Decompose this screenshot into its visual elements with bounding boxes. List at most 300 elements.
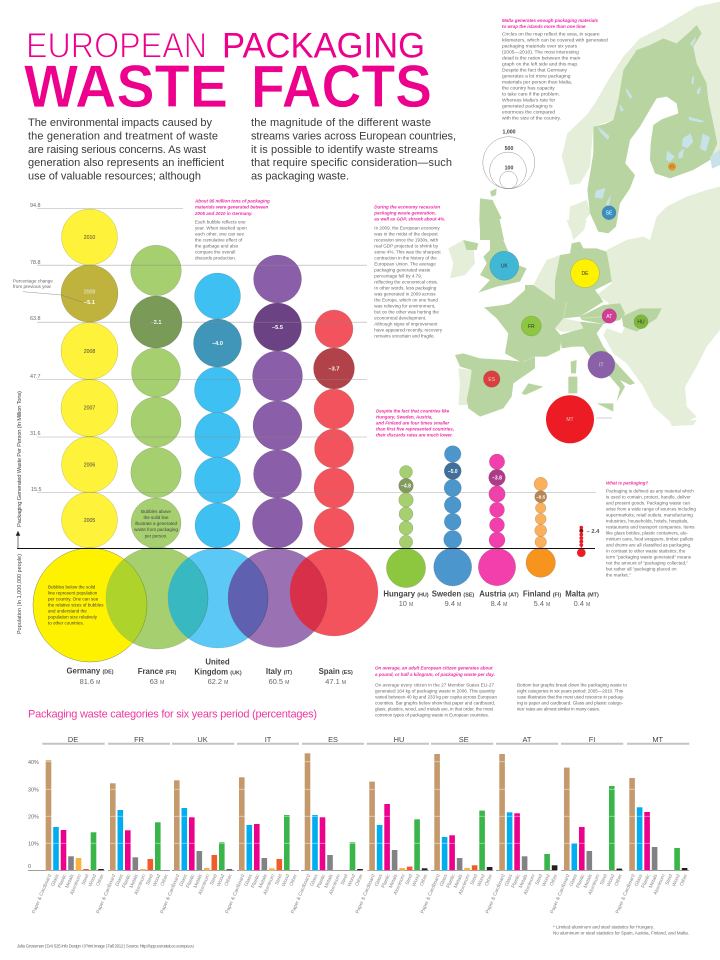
note: recession: percentage fell by 4.79, xyxy=(374,274,422,279)
note: what is packaging: but rather all "packaging placed on xyxy=(606,567,677,572)
note: bottom bar graphs: ing is paper and cardboard. Glass and plastic catego- xyxy=(517,700,623,705)
chart: FI: Other xyxy=(614,873,624,887)
map bubbles by country xyxy=(483,163,676,443)
note: what is packaging xyxy=(606,480,696,578)
Sweden waste bubbles: –5.0 xyxy=(448,469,458,475)
callout: percentage change xyxy=(13,278,82,302)
Germany waste bubbles: 2009 xyxy=(84,290,95,296)
chart: FR: Other xyxy=(160,873,170,887)
chart: FI: Wood xyxy=(606,873,616,887)
map legend circles xyxy=(483,130,535,189)
chart: SE: Steel xyxy=(469,873,479,886)
title: FACTS xyxy=(251,53,432,120)
map bubble: SE xyxy=(602,206,616,220)
note: what is packaging: What is packaging? xyxy=(606,480,649,485)
axis values: 47.7 xyxy=(30,374,40,380)
note: recession: packaging waste generation, xyxy=(373,210,436,215)
chart grid lines xyxy=(44,762,690,843)
chart: ES: Glass xyxy=(309,873,320,887)
Germany waste bubbles: 2010 xyxy=(84,235,95,241)
axis values: 78.8 xyxy=(30,260,40,266)
title: PACKAGING xyxy=(222,26,425,65)
label: France xyxy=(138,667,176,686)
label: Italy: Italy (IT) xyxy=(266,667,292,676)
label: United Kingdom: Kingdom (UK) xyxy=(194,668,242,676)
chart: DE: Plastic xyxy=(57,873,68,889)
label: Hungary xyxy=(383,590,429,608)
note: smaller countries xyxy=(376,408,454,437)
map bubble: DE xyxy=(571,259,599,288)
chart: DE: DE xyxy=(68,735,78,744)
chart: SE: Other xyxy=(484,873,494,887)
footnote: No aluminum or steel statistics for Spain, Austria, Finland, and Malta. xyxy=(553,930,689,936)
title: WASTE xyxy=(24,53,228,120)
note: Malta: detail is the ration between the main xyxy=(502,56,581,62)
axis values: 94.8 xyxy=(30,203,40,209)
note: Malta: (2005—2010). The most interesting xyxy=(502,50,579,56)
note: recession: In other words, less packaging xyxy=(374,286,437,291)
chart: FR: Wood xyxy=(152,873,162,887)
chart: AT: Paper & Cardboard xyxy=(485,873,507,915)
map bubble: SE: SE xyxy=(606,210,613,216)
chart: AT: Aluminum xyxy=(523,873,537,896)
note: 95 million tons: each other, one can see xyxy=(195,231,244,236)
note: Malta: to take care if the problem. xyxy=(502,92,560,98)
chart: MT: Glass xyxy=(634,873,644,887)
note: bottom bar graphs: case illustrates that the most used resource in packag- xyxy=(517,694,624,699)
country labels xyxy=(66,590,599,686)
map bubble: FR: FR xyxy=(528,324,535,330)
label: Italy: 60.5 M xyxy=(269,677,289,686)
chart: HU: Glass xyxy=(374,873,384,887)
map bubble: IT xyxy=(588,351,615,378)
chart: MT: Steel xyxy=(664,873,674,886)
callout: percentage change: Percentage change xyxy=(13,278,53,283)
chart: MT: Plastic xyxy=(640,873,652,889)
chart: SE: Metals xyxy=(453,873,464,889)
Germany waste bubbles: 2006 xyxy=(84,462,95,468)
chart axis labels: 10% xyxy=(28,841,39,847)
chart axis labels xyxy=(28,760,39,870)
note: bottom bar graphs xyxy=(517,682,627,711)
intro text: the magnitude of the different waste xyxy=(251,117,431,129)
Spain waste bubbles: –3.7 xyxy=(329,366,339,372)
chart: FR: Steel xyxy=(145,873,155,886)
chart: AT xyxy=(485,735,559,915)
axis label: population: Population (In 1,000,000 people) xyxy=(17,554,23,634)
chart: MT xyxy=(615,735,689,915)
footer credit: Julia Grossman | DAI 525 Info Design I | Print Image | Fall 2012 | Source: http://epp.eurostat.ec.europa.eu xyxy=(17,943,195,948)
chart: ES xyxy=(290,735,365,915)
chart: SE: Aluminum xyxy=(458,873,472,896)
France waste bubbles: per person. xyxy=(145,533,167,538)
note: recession: reflecting the economical crisis. xyxy=(374,280,438,285)
chart: HU xyxy=(355,735,429,915)
note: what is packaging: not the amount of "packaging collected," xyxy=(606,561,688,566)
population bubble note: population size relatively xyxy=(48,614,98,620)
France waste bubbles: –3.1 xyxy=(151,320,161,326)
chart: UK xyxy=(159,735,234,915)
map bubble: AT xyxy=(602,309,617,323)
chart: AT: AT xyxy=(523,735,532,744)
map bubble: MT xyxy=(546,395,612,443)
chart: IT: Metals xyxy=(258,873,269,889)
note: Malta: Malta generates enough packaging materials xyxy=(502,18,599,23)
note: what is packaging: In contrast to other waste statistics, the xyxy=(606,549,686,554)
note: recession: economical development. xyxy=(374,316,426,321)
note: what is packaging: the market." xyxy=(606,573,631,578)
axis values: 31.6 xyxy=(30,431,40,437)
intro text: use of valuable resources; although xyxy=(28,170,201,182)
label: United Kingdom: 62.2 M xyxy=(208,677,228,686)
chart: SE: SE xyxy=(459,735,469,744)
chart: FI: FI xyxy=(589,735,595,744)
map of Europe xyxy=(448,2,720,426)
map bubble: UK: UK xyxy=(501,264,508,270)
chart: FR: Metals xyxy=(129,873,140,889)
note: Malta: packaging materials over six years xyxy=(502,44,578,50)
Hungary waste bubbles: –4.8 xyxy=(401,484,411,490)
France waste bubbles: the solid line xyxy=(143,515,169,520)
France waste bubbles xyxy=(130,245,182,548)
chart: FI: Aluminum xyxy=(587,873,601,896)
map bubble: UK xyxy=(490,251,519,280)
chart: HU: Metals xyxy=(388,873,399,889)
intro text: the generation and treatment of waste xyxy=(28,130,218,142)
note: recession: as well as GDP, shrank about 4%. xyxy=(374,216,446,221)
chart: SE xyxy=(420,735,494,915)
France waste bubbles: illustrate a generated xyxy=(135,521,178,526)
note: 95 million tons: Each bubble reflects one xyxy=(195,219,246,224)
note: 95 million tons: the cumulative effect of xyxy=(195,237,243,242)
chart: FR: Aluminum xyxy=(133,873,147,896)
note: what is packaging: is used to contain, protect, handle, deliver xyxy=(606,495,691,500)
map bubble: AT: AT xyxy=(606,314,612,320)
chart: UK: Other xyxy=(224,873,234,887)
population bubble note: and understand the xyxy=(48,608,87,614)
footnote xyxy=(553,924,689,936)
chart: ES: Other xyxy=(354,873,365,887)
title: EUROPEAN xyxy=(26,26,207,65)
note: 95 million tons: discards production. xyxy=(195,255,236,260)
map bubble: FI xyxy=(668,163,676,170)
chart: HU: Other xyxy=(419,873,429,887)
note: average citizen: countries. Bar graphs below show that paper and cardboard, xyxy=(375,700,495,705)
chart: AT: Steel xyxy=(534,873,544,886)
note: smaller countries: their discards rates are much lower. xyxy=(376,432,453,437)
Germany waste bubbles: –5.1 xyxy=(84,300,95,306)
note: recession: Although signs of improvement xyxy=(374,322,438,327)
note: average citizen: a pound, or half a kilogram, of packaging waste per day. xyxy=(375,672,495,677)
population bubble note xyxy=(48,584,104,626)
intro text: The environmental impacts caused by xyxy=(28,117,212,129)
chart: HU: HU xyxy=(394,735,404,744)
note: bottom bar graphs: eight categories in six years period: 2005—2010. This xyxy=(517,688,624,693)
map bubble: MT: MT xyxy=(566,417,574,423)
label: Sweden: 9.4 M xyxy=(445,599,461,608)
map bubble: IT: IT xyxy=(599,362,604,368)
chart: IT: Paper & Cardboard xyxy=(224,873,246,915)
note: average citizen: generated 164 kg of packaging waste in 2006. This quantity xyxy=(375,688,496,693)
label: Spain: Spain (ES) xyxy=(319,667,353,676)
chart: DE: Other xyxy=(95,873,106,887)
label: Sweden xyxy=(432,590,474,608)
axis label: waste: Packaging Generated Waste Per Person (In Million Tons) xyxy=(17,391,23,527)
note: what is packaging: like glass bottles, plastic containers, alu- xyxy=(606,531,688,536)
chart: AT: Glass xyxy=(504,873,514,887)
chart: MT: Wood xyxy=(671,873,682,887)
population bubble note: the relative sizes of bubbles xyxy=(48,602,104,608)
chart axis labels: 30% xyxy=(28,787,39,793)
note: what is packaging: and present goods. Packaging waste can xyxy=(606,501,690,506)
note: recession: the Europe, which on one hand xyxy=(374,298,438,303)
intro text: are raising serious concerns. As wast xyxy=(28,144,206,156)
note: average citizen: On average every citizen in the 27 Member States EU-27 xyxy=(375,682,494,687)
chart: DE: Paper & Cardboard xyxy=(31,873,53,915)
intro text: generation also represents an inefficient xyxy=(28,157,224,169)
map legend circles: 1,000 xyxy=(503,130,516,136)
callout: percentage change: from previous year xyxy=(13,284,52,289)
chart: MT: MT xyxy=(652,735,664,744)
chart heading: Packaging waste categories for six years period (percentages) xyxy=(28,708,317,720)
chart: IT: IT xyxy=(265,735,272,744)
chart: FI: Plastic xyxy=(575,873,587,889)
note: Malta: generated packaging is xyxy=(502,104,553,110)
chart: ES: ES xyxy=(328,735,338,744)
note: Malta: generates a lot more packaging xyxy=(502,74,571,80)
label: Germany xyxy=(66,666,114,686)
Spain waste bubbles xyxy=(314,310,354,548)
chart: FI: Paper & Cardboard xyxy=(549,873,571,915)
note: 95 million tons: year. When stacked upon xyxy=(195,225,247,230)
chart: ES: Steel xyxy=(340,873,350,886)
chart: FI: Glass xyxy=(568,873,579,887)
note: 95 million tons: 2005 and 2010 in Germany. xyxy=(194,211,253,216)
Malta waste bubbles xyxy=(579,526,600,548)
note: recession: was in the midst of the deepest xyxy=(374,232,438,237)
note: average citizen: On average, an adult European citizen generates about xyxy=(375,666,493,671)
label: Austria: Austria (AT) xyxy=(479,590,519,598)
note: what is packaging: minium cans, food wrappers, timber pallets xyxy=(606,537,694,542)
label: Germany: Germany (DE) xyxy=(66,666,114,676)
note: recession: packaging generated waste xyxy=(374,268,431,273)
France waste bubbles: waste from packaging xyxy=(134,527,178,532)
note: Malta: Circles on the map reflect the area, in square xyxy=(502,32,600,38)
label: Malta: 0.4 M xyxy=(574,599,590,608)
Italy waste bubbles: –5.5 xyxy=(272,325,283,331)
population bubble note: per country. One can see xyxy=(48,596,99,602)
chart: FR: Paper & Cardboard xyxy=(95,873,117,915)
chart: SE: Wood xyxy=(476,873,487,887)
Finland waste bubbles xyxy=(534,477,547,548)
Hungary waste bubbles xyxy=(399,466,413,549)
chart: FR: FR xyxy=(134,735,144,744)
note: Malta: with the size of the country. xyxy=(502,116,561,122)
note: recession: have appeared recently, recovery xyxy=(374,328,443,333)
note: Malta xyxy=(502,18,608,122)
axis values: 63.8 xyxy=(30,316,40,322)
chart: UK: UK xyxy=(197,735,208,744)
Germany waste bubbles: 2007 xyxy=(84,406,95,412)
map bubble: DE: DE xyxy=(582,271,589,277)
chart: AT: Metals xyxy=(518,873,529,889)
note: Malta: to wrap the islands more than one time xyxy=(502,24,586,29)
intro text: it is possible to identify waste streams xyxy=(251,144,438,156)
chart: FR: Glass xyxy=(114,873,125,887)
chart: UK: Paper & Cardboard xyxy=(159,873,181,915)
label: Hungary: Hungary (HU) xyxy=(383,590,429,598)
population bubble note: Bubbles below the solid xyxy=(48,584,96,590)
chart axis labels: 20% xyxy=(28,814,39,820)
chart: DE: Aluminum xyxy=(69,873,83,896)
note: recession: but on the other was hurting the xyxy=(374,310,439,315)
population bubble note: line represent population xyxy=(48,590,98,596)
map bubble: ES: ES xyxy=(488,377,496,383)
map bubble: HU xyxy=(634,315,648,329)
note: bottom bar graphs: Bottom bar graphs break down the packaging waste to xyxy=(517,682,627,687)
chart: UK: Aluminum xyxy=(197,873,211,896)
France waste bubbles: Bubbles above xyxy=(141,509,171,514)
chart: HU: Steel xyxy=(404,873,414,886)
note: Malta: materials per person than Malta, xyxy=(502,80,572,86)
note: average citizen: varied between 40 kg and 233 kg per capita across European xyxy=(375,694,497,699)
chart: ES: Paper & Cardboard xyxy=(290,873,312,915)
note: recession: remains uncertain and fragile. xyxy=(374,334,435,339)
note: Malta: graph on the left side and this map. xyxy=(502,62,578,68)
note: 95 million tons: compare the overall xyxy=(195,249,235,254)
note: what is packaging: Packaging is defined as any material which xyxy=(606,489,694,494)
chart: MT: Aluminum xyxy=(653,873,667,896)
population bubbles xyxy=(33,547,586,662)
chart: UK: Plastic xyxy=(185,873,197,889)
footnote: * Limited aluminum and steel statistics for Hungary. xyxy=(553,924,654,930)
label: Austria xyxy=(479,590,519,608)
map bubble: ES xyxy=(483,371,500,387)
intro text xyxy=(28,117,456,182)
chart: UK: Steel xyxy=(209,873,219,886)
Germany waste bubbles: 2005 xyxy=(84,518,95,524)
note: what is packaging: and drums are all classified as packaging. xyxy=(606,543,691,548)
note: Malta: kilometers, which can be covered with generated xyxy=(502,38,608,44)
Malta waste bubbles: – 2.4 xyxy=(586,529,600,535)
note: recession: In 2009, the European economy xyxy=(374,226,440,231)
chart: IT: Glass xyxy=(243,873,254,887)
label: France: France (FR) xyxy=(138,667,176,676)
axis values xyxy=(30,203,42,493)
label: Finland: Finland (FI) xyxy=(523,590,561,598)
chart: IT: Other xyxy=(289,873,299,887)
label: United Kingdom: United xyxy=(205,658,230,666)
label: France: 63 M xyxy=(150,677,164,686)
label: Sweden: Sweden (SE) xyxy=(432,590,474,598)
chart: ES: Plastic xyxy=(316,873,327,889)
note: Malta: the country has capacity xyxy=(502,86,555,92)
label: Spain xyxy=(319,667,353,686)
label: Spain: 47.1 M xyxy=(325,677,346,686)
chart: HU: Paper & Cardboard xyxy=(355,873,377,915)
note: 95 million tons xyxy=(194,199,270,260)
note: smaller countries: Despite the fact that countries like xyxy=(376,408,450,413)
chart: DE: Steel xyxy=(81,873,91,886)
note: what is packaging: industries, households, hotels, hospitals, xyxy=(606,519,688,524)
note: what is packaging: term "packaging waste generated" means xyxy=(606,555,692,560)
map legend circles: 500 xyxy=(505,146,513,152)
chart: IT: Steel xyxy=(274,873,284,886)
chart: IT: Plastic xyxy=(250,873,262,889)
note: recession: real GDP projected to shrink by xyxy=(374,244,439,249)
chart: IT: Aluminum xyxy=(262,873,276,896)
map bubble: FI: FI xyxy=(670,164,674,169)
note: Malta: Despite the fact that Germany xyxy=(502,68,568,74)
chart: FI xyxy=(549,735,624,915)
population bubble note: to other countries. xyxy=(48,620,84,626)
label: Italy xyxy=(266,667,292,686)
chart: ES: Aluminum xyxy=(328,873,342,896)
chart: AT: Plastic xyxy=(510,873,522,889)
note: recession xyxy=(373,204,446,339)
UK waste bubbles: –4.0 xyxy=(212,341,223,347)
map legend circles: 100 xyxy=(505,166,513,172)
label: Finland xyxy=(523,590,561,608)
label: Malta: Malta (MT) xyxy=(565,590,599,598)
label: Malta xyxy=(565,590,599,608)
note: what is packaging: arise from a wide range of sources including xyxy=(606,507,696,512)
note: recession: some 4%. This was the sharpest xyxy=(374,250,441,255)
chart: FI: Metals xyxy=(583,873,594,889)
chart: FR: Plastic xyxy=(121,873,133,889)
chart: UK: Metals xyxy=(193,873,204,889)
label: Hungary: 10 M xyxy=(399,599,413,608)
note: average citizen: glass, plastics, wood, and metals are, in that order, the most xyxy=(375,706,494,711)
chart: DE: Metals xyxy=(64,873,76,889)
note: smaller countries: Hungary, Sweden, Austria, xyxy=(376,414,433,419)
arrow: vertical axis xyxy=(16,532,20,548)
note: recession: During the economy recession xyxy=(374,204,440,209)
baseline xyxy=(17,548,595,550)
note: average citizen: common types of packaging waste in European countries. xyxy=(375,712,489,717)
label: Austria: 8.4 M xyxy=(491,599,507,608)
chart: AT: Other xyxy=(549,873,559,887)
Sweden waste bubbles xyxy=(444,446,462,548)
note: Malta: enormous the compared xyxy=(502,110,555,116)
chart: MT: Other xyxy=(679,873,689,887)
axis values: 15.5 xyxy=(31,487,42,493)
chart: HU: Wood xyxy=(411,873,422,887)
Germany waste bubbles: 2008 xyxy=(84,349,95,355)
intro text: as packaging waste. xyxy=(251,170,349,182)
Italy waste bubbles xyxy=(252,255,302,548)
map bubble: FR xyxy=(521,316,541,336)
map bubble: HU: HU xyxy=(637,320,645,326)
note: average citizen xyxy=(375,666,497,717)
chart: FR xyxy=(95,735,170,915)
chart: DE xyxy=(28,735,106,915)
note: smaller countries: and Finland are four times smaller xyxy=(376,420,450,425)
chart: MT: Metals xyxy=(648,873,659,889)
Finland waste bubbles: –8.5 xyxy=(536,495,546,500)
chart: MT: Paper & Cardboard xyxy=(615,873,637,915)
note: smaller countries: than first five represented countries, xyxy=(376,426,454,431)
UK waste bubbles xyxy=(194,273,242,548)
chart: SE: Glass xyxy=(439,873,449,887)
title xyxy=(24,26,432,120)
chart: HU: Aluminum xyxy=(393,873,407,896)
chart: UK: Glass xyxy=(178,873,189,887)
chart: ES: Metals xyxy=(323,873,335,889)
note: what is packaging: supermarkets, retail outlets, manufacturing xyxy=(606,513,693,518)
label: Finland: 5.4 M xyxy=(534,599,550,608)
note: recession: was generated in 2009 across xyxy=(374,292,436,297)
